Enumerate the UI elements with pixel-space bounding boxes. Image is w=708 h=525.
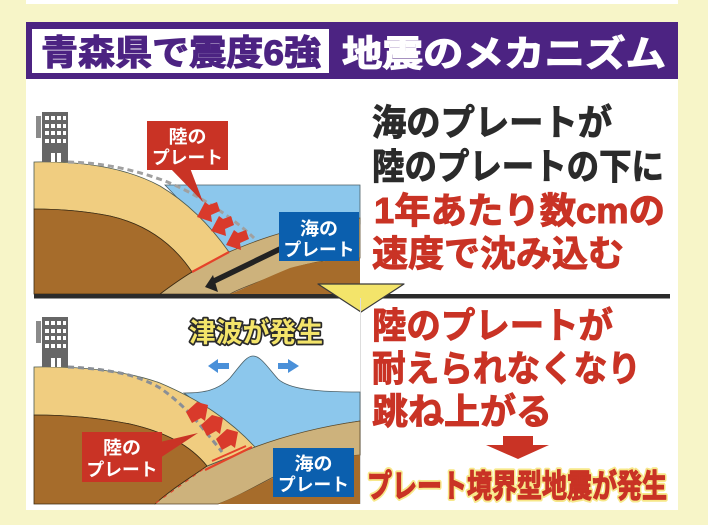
callout: land plate: 陸の [103,438,141,458]
land plate [34,367,255,466]
callout: ocean plate: プレート [278,475,349,495]
text block: top explanation: 速度で沈み込む [372,233,624,274]
heading: mechanism: 地震のメカニズム [342,33,666,74]
callout: ocean plate [279,212,359,261]
text block: top explanation: 1年あたり数cmの [374,190,665,231]
oceanic plate [160,218,360,294]
red rupture arrow [205,447,252,470]
divider line [34,294,670,298]
sea [165,185,360,252]
arrow: tsunami left [208,359,229,373]
callout: land plate: プレート [152,148,223,168]
callout: land plate: プレート [86,460,158,480]
label: tsunami occurs: 津波が発生 [189,317,323,348]
callout: land plate [82,432,198,482]
text block: top explanation: 陸のプレートの下に [372,146,664,187]
icon: building [36,112,68,162]
diagram: before, plate subduction [34,112,360,294]
callout: land plate [147,121,228,202]
callout: ocean plate: プレート [284,240,354,260]
red pressure arrows [197,202,249,250]
heading: Aomori intensity: 青森県で震度6強 [41,34,321,73]
diagram: after, plate rebound and tsunami [34,298,361,504]
mantle under ocean plate [230,258,360,294]
land plate [34,162,229,272]
text block: top explanation [372,102,665,274]
callout: land plate: 陸の [168,127,206,147]
text block: top explanation: 海のプレートが [372,102,612,143]
text block: bottom explanation: 跳ね上がる [372,391,552,432]
icon: building [36,317,68,367]
text block: bottom explanation: 陸のプレートが [372,305,613,346]
land mantle [34,415,207,504]
dashed former surface [68,162,254,238]
red contact zone [192,252,229,272]
header band [26,22,678,79]
callout: ocean plate: 海の [300,219,338,239]
dashed former surface [68,367,222,452]
arrow: result down [486,436,549,459]
oceanic plate [155,421,360,504]
mantle under plate [218,455,360,504]
red rebound arrows [186,402,238,450]
callout: ocean plate: 海の [294,454,332,474]
arrow: yellow downward triangle [318,284,404,312]
sea with tsunami bulge [184,356,360,447]
callout: ocean plate [273,448,354,497]
text block: bottom explanation: 耐えられなくなり [372,348,641,389]
arrow: tsunami right [278,359,299,373]
land mantle [34,209,192,294]
arrow: ocean plate motion [212,249,280,282]
text block: bottom explanation [372,305,641,432]
